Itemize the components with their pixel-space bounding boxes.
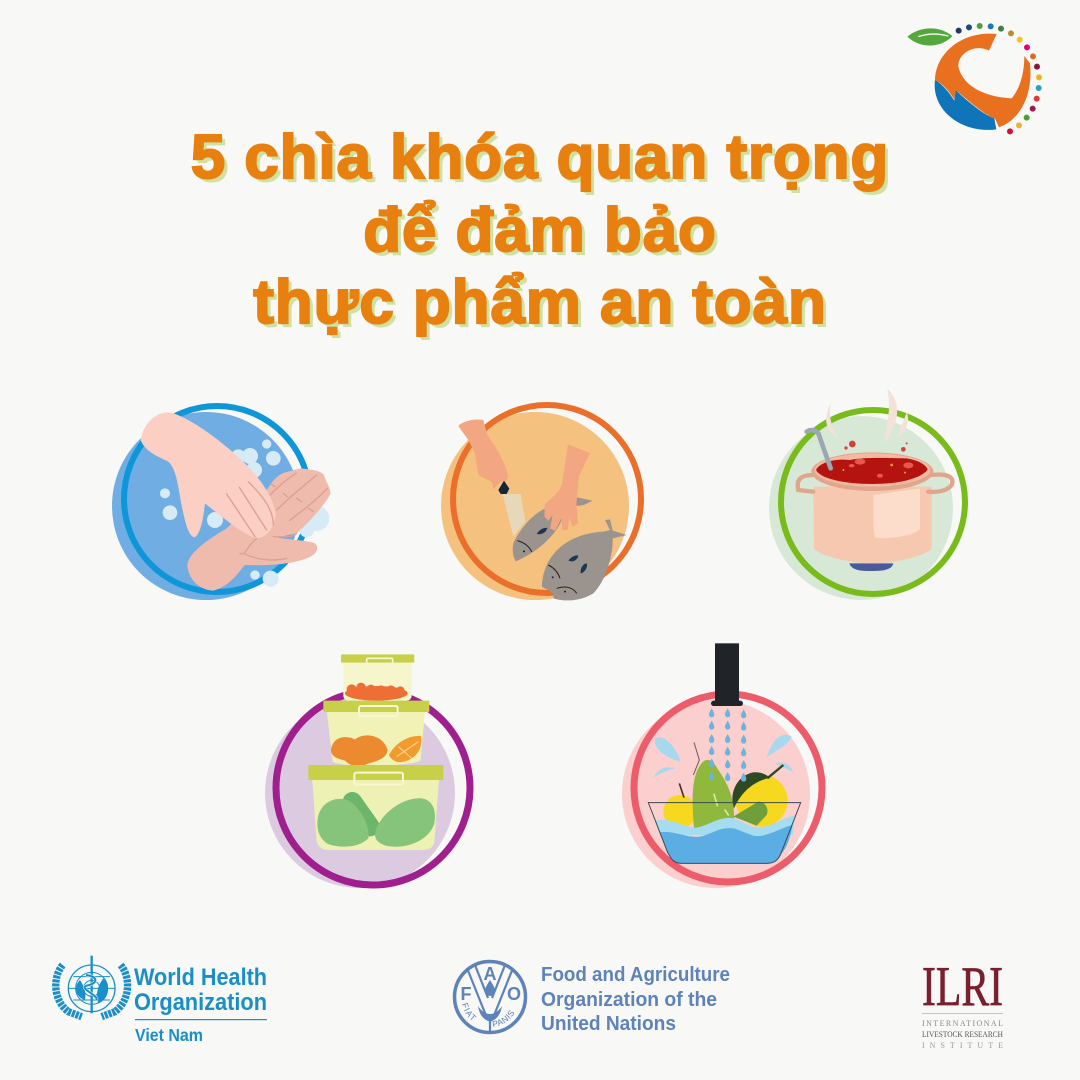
panel: cook thoroughly	[769, 388, 965, 600]
title: thực phẩm an toàn	[253, 268, 827, 337]
panel: store safely	[265, 654, 470, 888]
icon: blue hand	[935, 80, 996, 130]
title: để đảm bảo	[363, 196, 717, 264]
icon: orange crescent	[935, 34, 1031, 127]
background disc	[769, 416, 953, 600]
ring	[276, 691, 470, 885]
text: WHO name: World Health	[134, 964, 267, 991]
text: WHO name: Viet Nam	[135, 1025, 203, 1045]
ring	[781, 410, 965, 594]
icon: FAO emblem	[452, 960, 528, 1034]
panel: wash produce with clean water	[622, 643, 822, 888]
logo: ILRI	[922, 956, 1003, 1050]
icon: FAO emblem: O	[507, 984, 521, 1004]
text: WHO name: Organization	[134, 989, 267, 1016]
icon: WHO emblem	[56, 956, 128, 1017]
ring	[634, 694, 822, 882]
title	[191, 123, 889, 340]
logo: ILRI: INSTITUTE	[922, 1041, 1003, 1050]
icon: hands, knife, fish	[458, 419, 627, 600]
ring	[124, 406, 310, 592]
logo: FAO	[452, 960, 730, 1035]
icon: FAO emblem: F	[460, 984, 472, 1004]
text: FAO name: Food and Agriculture	[541, 964, 730, 986]
text: WHO name	[134, 964, 267, 1045]
background disc	[112, 412, 300, 600]
icon: FAO emblem: A	[484, 964, 496, 984]
icon: stacked containers	[308, 654, 443, 850]
icon: leaf	[907, 28, 952, 46]
icon: dots ring	[956, 23, 1042, 134]
ring	[453, 405, 641, 593]
title: 5 chìa khóa quan trọng	[191, 123, 889, 192]
panel: cut fish separately	[441, 405, 641, 600]
icon: hands with soap	[141, 412, 331, 591]
text: FAO name	[541, 964, 730, 1035]
panel: wash hands	[112, 406, 331, 600]
background disc	[622, 700, 810, 888]
icon: faucet, fruit, bowl	[648, 643, 801, 863]
background disc	[441, 412, 629, 600]
text: FAO name: Organization of the	[541, 989, 717, 1011]
icon: FAO emblem: FIAT	[462, 1002, 476, 1020]
background disc	[265, 698, 455, 888]
icon: cooking pot	[798, 388, 952, 571]
icon: FAO emblem: PANIS	[492, 1010, 514, 1027]
logo: ILRI: LIVESTOCK RESEARCH	[922, 1030, 1003, 1039]
logo: ILRI: INTERNATIONAL	[922, 1019, 1003, 1028]
logo: World Health Organization	[56, 956, 267, 1045]
logo: orange heart and hands	[907, 23, 1042, 134]
text: FAO name: United Nations	[541, 1013, 676, 1035]
logo: ILRI: ILRI	[922, 956, 1003, 1018]
